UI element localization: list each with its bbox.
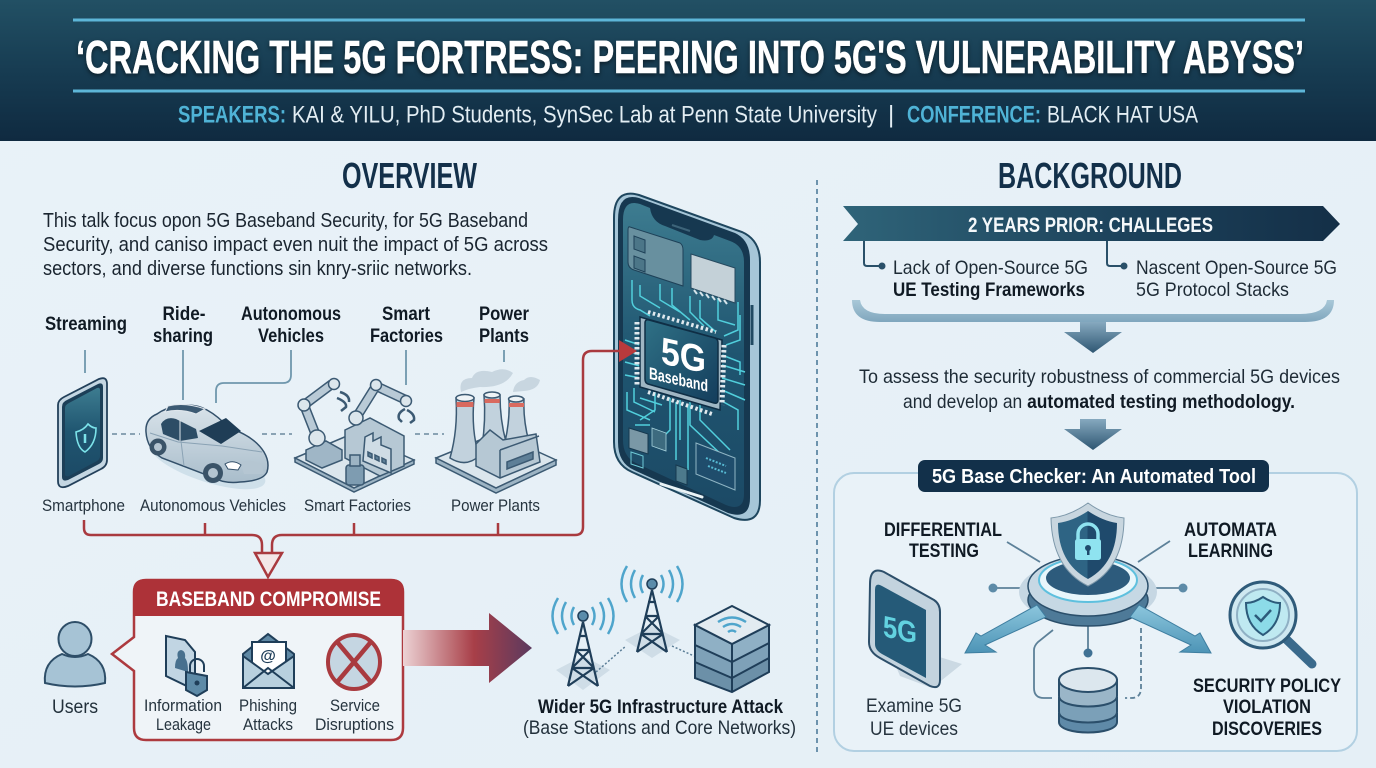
panel heading: BASEBAND COMPROMISE xyxy=(156,588,381,611)
discoveries label: DISCOVERIES xyxy=(1212,719,1322,740)
discoveries label xyxy=(1193,676,1341,740)
header banner xyxy=(0,0,1376,141)
examine label xyxy=(866,695,962,740)
icon: service disruption xyxy=(328,635,380,689)
arrow: to discoveries xyxy=(1130,605,1211,653)
icon: phishing envelope: @ xyxy=(260,648,276,665)
ribbon: challenges xyxy=(843,206,1340,241)
threat labels xyxy=(144,697,394,734)
icon: users xyxy=(45,622,105,686)
device labels xyxy=(42,496,540,515)
challenge items: Nascent Open-Source 5G xyxy=(1136,257,1337,279)
arrow: down one xyxy=(1064,322,1122,353)
icon: power plant xyxy=(436,369,556,493)
sector labels: Plants xyxy=(479,326,529,347)
users label: Users xyxy=(52,696,98,718)
overview body text: This talk focus opon 5G Baseband Security, for 5G Baseband xyxy=(43,210,528,232)
sector labels: Vehicles xyxy=(258,326,324,347)
sector labels: Power xyxy=(479,304,530,325)
icon: smartphone xyxy=(58,378,107,487)
device labels: Smartphone xyxy=(42,496,125,515)
challenge items: UE Testing Frameworks xyxy=(893,279,1085,301)
phone side and body xyxy=(614,194,760,520)
examine label: Examine 5G xyxy=(866,695,962,717)
device labels: Autonomous Vehicles xyxy=(140,496,286,515)
threat labels: Attacks xyxy=(243,716,293,734)
device labels: Smart Factories xyxy=(304,496,411,515)
home bar xyxy=(661,484,702,497)
overview heading: OVERVIEW xyxy=(342,155,477,196)
sector labels xyxy=(45,304,530,347)
threat labels: Service xyxy=(330,697,380,715)
bracket xyxy=(852,300,1334,322)
top chips xyxy=(628,227,683,286)
sector labels: sharing xyxy=(153,326,213,347)
icon: smart factory robots xyxy=(295,378,414,492)
panel title xyxy=(918,460,1269,492)
sector labels: Ride- xyxy=(162,304,206,325)
tablet 5G label: 5G xyxy=(883,611,917,651)
automata learning label xyxy=(1184,520,1277,562)
overview body text: sectors, and diverse functions sin knry-sriic networks. xyxy=(43,258,472,280)
discoveries label: VIOLATION xyxy=(1223,697,1311,718)
speakers and conference line: CONFERENCE: xyxy=(907,102,1041,128)
red header xyxy=(133,579,404,616)
chip label xyxy=(649,327,708,396)
differential testing label: TESTING xyxy=(909,541,979,562)
sector labels: Factories xyxy=(370,326,443,347)
arrow: to UE devices xyxy=(965,605,1046,653)
circuit traces xyxy=(625,280,745,470)
connector lines xyxy=(993,541,1183,698)
icon: information leakage xyxy=(166,636,207,696)
threat labels: Information xyxy=(144,697,222,715)
icon: car xyxy=(145,405,271,500)
speakers and conference line xyxy=(178,102,1198,128)
icon: database xyxy=(1059,668,1117,732)
speakers and conference line: BLACK HAT USA xyxy=(1047,102,1198,128)
sector connector lines xyxy=(85,350,504,434)
differential testing label: DIFFERENTIAL xyxy=(884,520,1002,541)
challenge items: 5G Protocol Stacks xyxy=(1136,279,1289,301)
objective text: and develop an automated testing methodology. xyxy=(903,391,1295,413)
automata learning label: LEARNING xyxy=(1188,541,1273,562)
icon: phishing envelope xyxy=(243,634,294,688)
panel title: 5G Base Checker: An Automated Tool xyxy=(932,465,1256,488)
icon: magnifier xyxy=(1230,582,1312,664)
threat labels: Phishing xyxy=(239,697,297,715)
objective text xyxy=(859,366,1340,413)
arrow: down two xyxy=(1064,419,1122,450)
discoveries label: SECURITY POLICY xyxy=(1193,676,1341,697)
sector labels: Smart xyxy=(382,304,431,325)
examine label: UE devices xyxy=(870,718,958,740)
arrow: compromise to infrastructure xyxy=(403,613,532,683)
objective text: To assess the security robustness of commercial 5G devices xyxy=(859,366,1340,388)
threat labels: Disruptions xyxy=(315,716,394,734)
red bracket connectors and arrow to baseband xyxy=(84,340,637,577)
icon: towers and server xyxy=(552,566,769,692)
large phone with baseband chip xyxy=(614,194,760,520)
threat labels: Leakage xyxy=(156,716,211,734)
overview body text: Security, and caniso impact even nuit the impact of 5G across xyxy=(43,234,548,256)
background heading: BACKGROUND xyxy=(998,155,1182,196)
ribbon: challenges: 2 YEARS PRIOR: CHALLEGES xyxy=(968,214,1213,237)
chip label: 5G xyxy=(661,330,706,382)
infrastructure attack label: Wider 5G Infrastructure Attack xyxy=(538,696,783,718)
lower chips xyxy=(629,428,648,454)
differential testing label xyxy=(884,520,1002,562)
overview body text xyxy=(43,210,548,280)
device labels: Power Plants xyxy=(451,496,540,515)
panel: 5G base checker xyxy=(834,460,1357,751)
speakers and conference line: SPEAKERS: xyxy=(178,102,286,128)
baseband chip xyxy=(637,312,724,414)
chip label: Baseband xyxy=(649,363,708,396)
central platform and shield xyxy=(1019,503,1157,626)
challenge items: Lack of Open-Source 5G xyxy=(893,257,1088,279)
sector labels: Autonomous xyxy=(241,304,341,325)
sector labels: Streaming xyxy=(45,314,127,335)
challenge items xyxy=(864,241,1337,301)
infrastructure attack label xyxy=(523,696,796,739)
panel: baseband compromise xyxy=(112,579,404,740)
icon: 5G tablet xyxy=(869,570,962,688)
infrastructure attack label: (Base Stations and Core Networks) xyxy=(523,717,796,739)
phone screen xyxy=(623,203,744,507)
divider xyxy=(816,180,818,752)
speakers and conference line: | xyxy=(888,102,894,128)
automata learning label: AUTOMATA xyxy=(1184,520,1277,541)
speakers and conference line: KAI & YILU, PhD Students, SynSec Lab at Penn State University xyxy=(292,102,877,128)
